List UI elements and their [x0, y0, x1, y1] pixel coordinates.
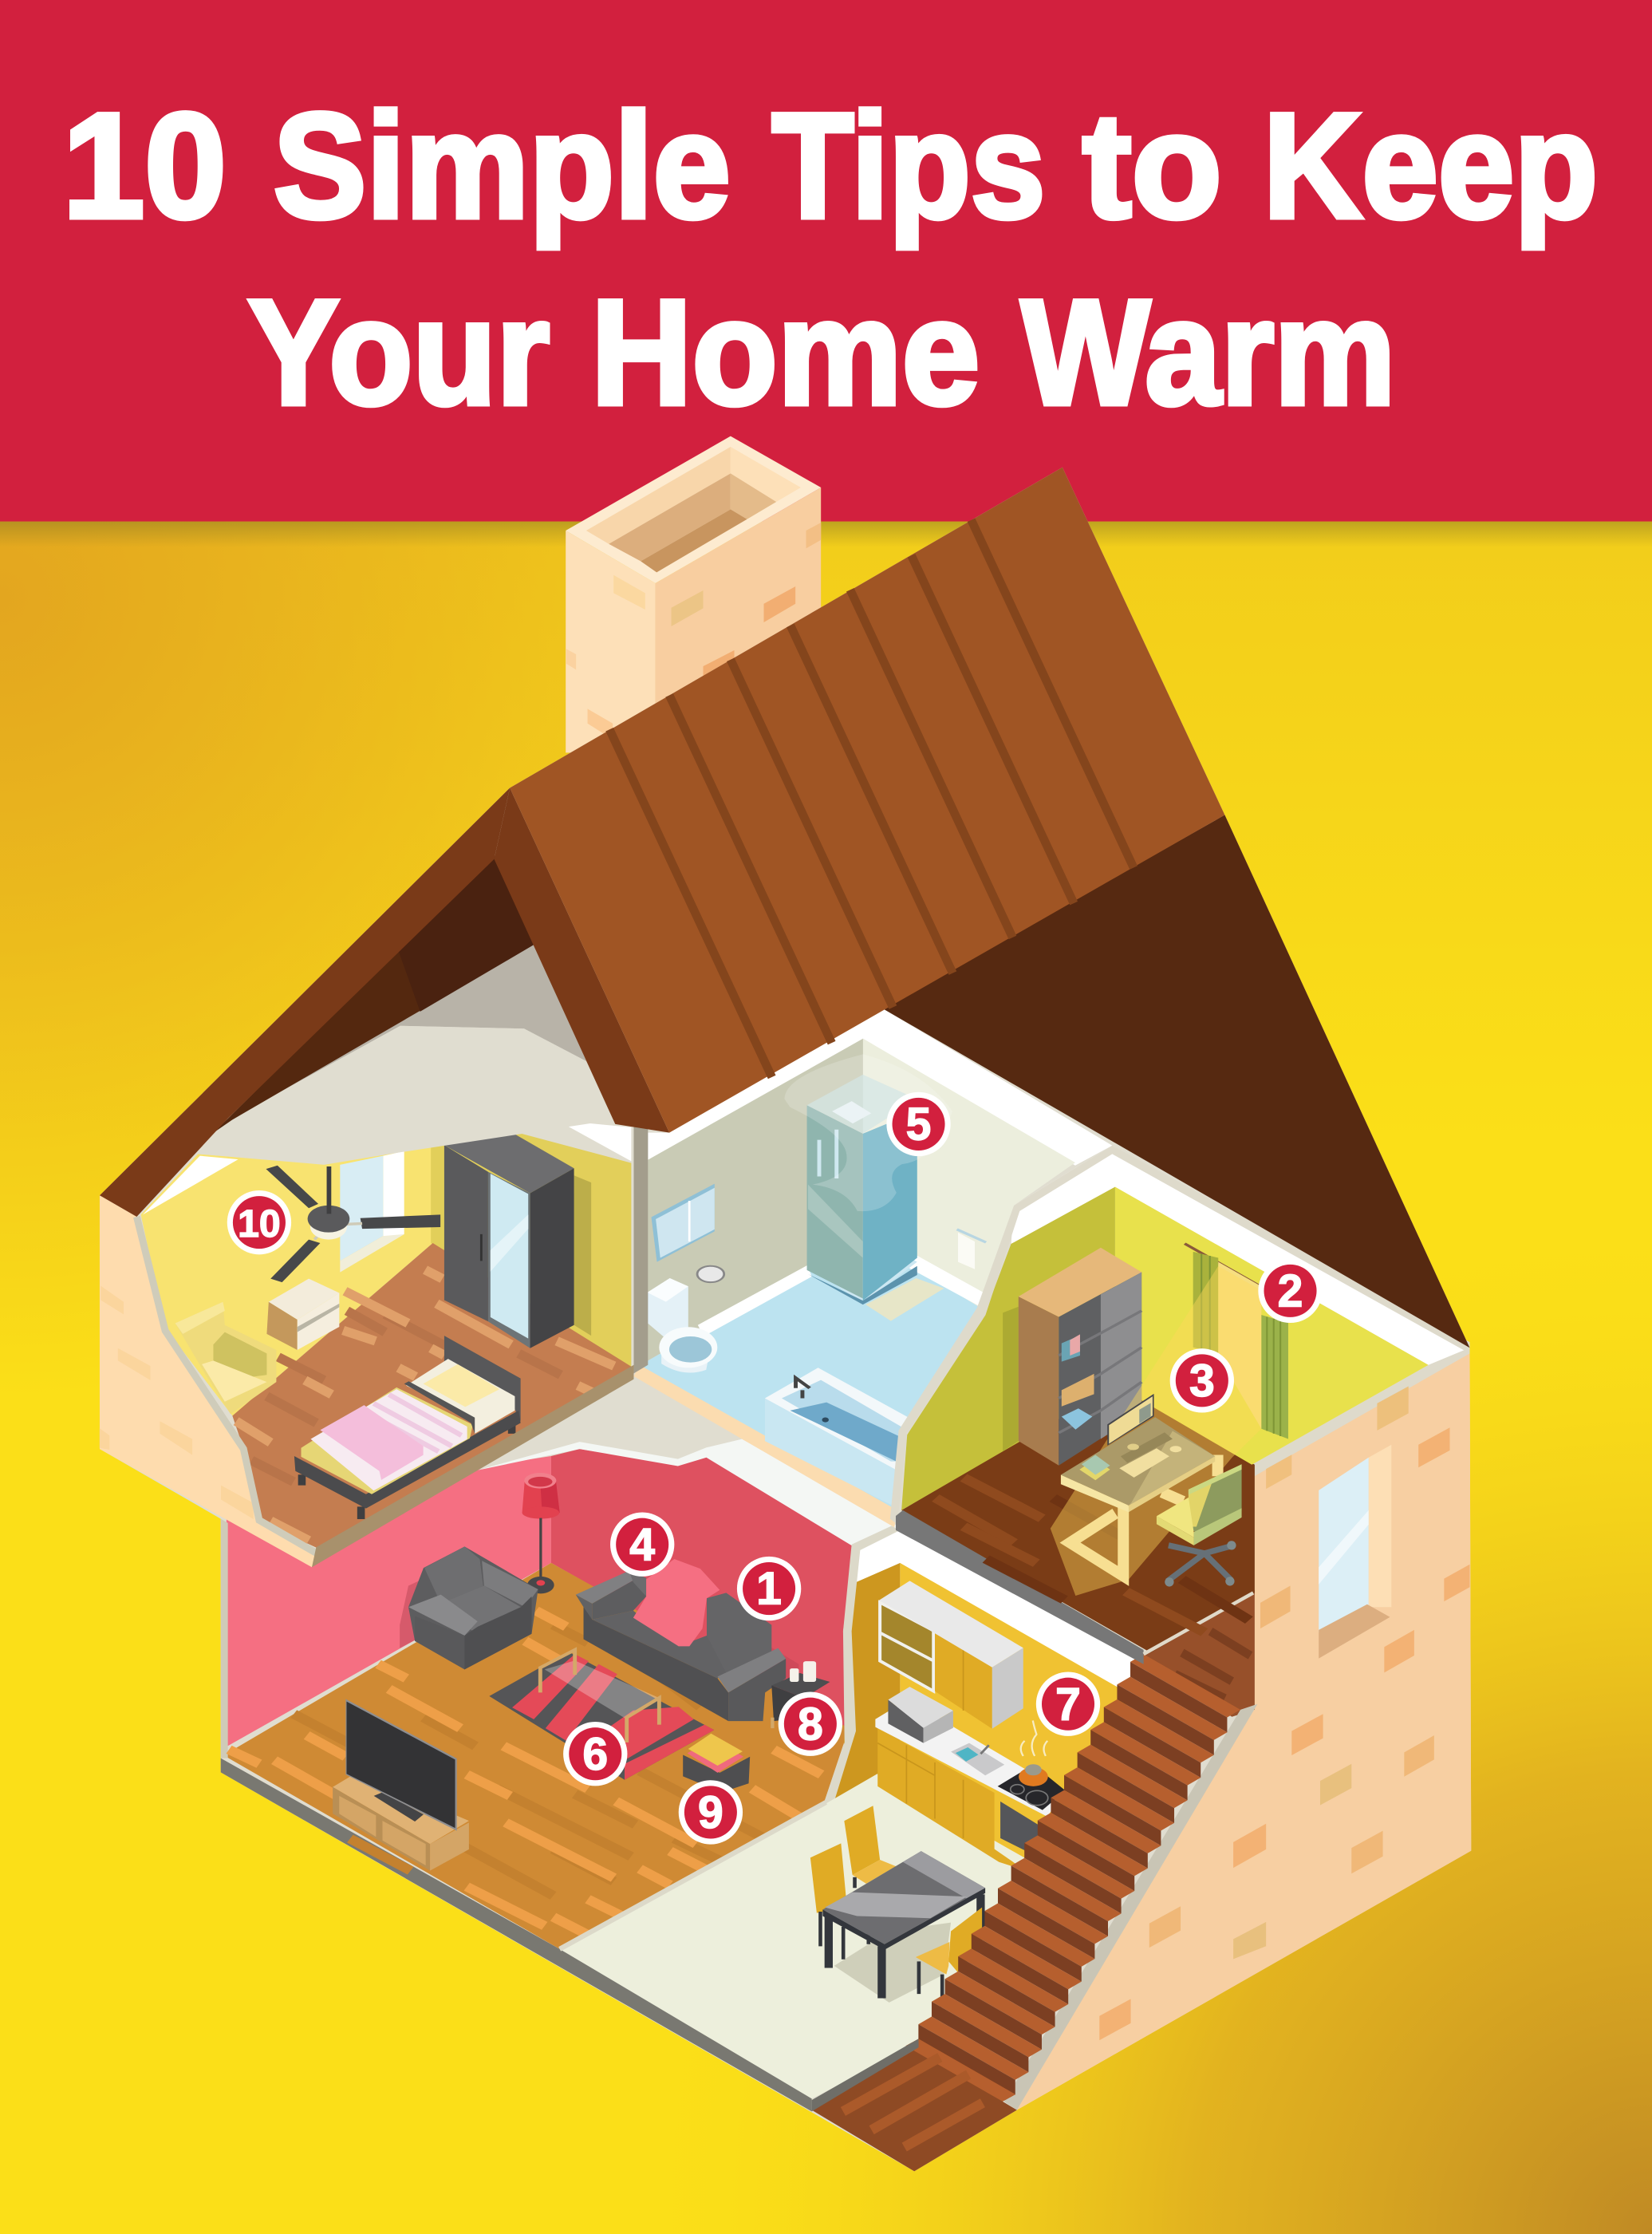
throw blanket — [633, 1559, 720, 1646]
partition between bedroom and bathroom — [633, 1126, 648, 1373]
bedroom — [100, 1120, 633, 1567]
nightstand — [266, 1279, 339, 1350]
floor lip — [221, 1758, 812, 2111]
steam — [784, 1054, 952, 1211]
chimney — [566, 436, 821, 752]
side table with candles — [771, 1661, 830, 1728]
marker 4 — [610, 1513, 674, 1577]
monitor — [1107, 1394, 1154, 1451]
sink — [951, 1743, 1004, 1775]
books — [1079, 1455, 1110, 1480]
title: Tips — [772, 81, 1045, 249]
white wall band — [854, 1526, 1151, 1695]
living room floor — [223, 1563, 849, 1949]
sofa — [576, 1571, 798, 1721]
bedroom right wall — [431, 1131, 631, 1368]
marker 5 — [886, 1092, 951, 1156]
dining floor — [560, 1710, 1125, 2098]
roof — [100, 468, 1469, 1348]
numbered markers — [227, 1092, 1323, 1845]
marker 3: 3 — [1189, 1356, 1215, 1407]
office room — [890, 1146, 1469, 1664]
mouse — [1170, 1446, 1181, 1452]
title: to — [1082, 81, 1222, 249]
roof ribs — [609, 520, 1134, 1077]
bath mat — [865, 1278, 944, 1321]
marker 2: 2 — [1278, 1265, 1303, 1317]
roof underside dark — [214, 855, 534, 1133]
desk — [1061, 1394, 1218, 1576]
marker 3 — [1170, 1348, 1234, 1413]
towel rack — [957, 1229, 986, 1269]
white ceiling band — [557, 1120, 631, 1161]
marker 2 — [1258, 1259, 1323, 1323]
marker 8: 8 — [798, 1699, 823, 1750]
mirror — [652, 1184, 715, 1262]
upper cabinets — [879, 1581, 1023, 1729]
right brick wall — [1017, 1342, 1471, 2110]
top white band — [1011, 1146, 1469, 1365]
bedroom planks — [236, 1270, 614, 1541]
office left wall — [901, 1187, 1115, 1510]
office planks — [936, 1478, 1249, 1632]
bath floor — [640, 1237, 985, 1510]
armchair — [400, 1546, 538, 1669]
marker 4: 4 — [629, 1519, 655, 1570]
floor lamp — [522, 1473, 560, 1593]
wall edge left — [221, 1519, 228, 1758]
bookshelf — [1003, 1248, 1141, 1466]
marker 5: 5 — [906, 1099, 931, 1151]
marker 1 — [737, 1557, 801, 1620]
marker 6 — [563, 1722, 627, 1786]
yellow background — [0, 522, 1652, 2234]
right roof dark side — [883, 815, 1469, 1348]
staircase — [812, 1590, 1257, 2171]
marker 6: 6 — [582, 1729, 608, 1780]
curtains — [1185, 1244, 1288, 1439]
bathtub — [765, 1368, 910, 1506]
left brick wall — [100, 1195, 316, 1567]
keyboard — [1119, 1448, 1169, 1478]
title: Simple — [274, 81, 731, 249]
lower cabinets — [875, 1699, 1066, 1871]
floor planks — [229, 1611, 822, 1935]
left eave — [100, 788, 510, 1217]
bedroom wall edge — [136, 1217, 316, 1553]
marker 8 — [779, 1692, 842, 1756]
shower — [784, 1054, 952, 1304]
gable side — [495, 788, 669, 1133]
marker 9 — [679, 1780, 743, 1845]
office floor — [901, 1385, 1255, 1652]
wall window — [1319, 1445, 1391, 1659]
header banner — [0, 0, 1652, 522]
bathroom — [633, 1008, 1112, 1527]
title: 10 — [63, 81, 227, 249]
marker 9: 9 — [698, 1787, 723, 1838]
kitchen right wall — [900, 1563, 1132, 1881]
title: Warm — [1021, 268, 1396, 436]
brick patches — [1099, 1387, 1469, 2040]
TV cabinet — [333, 1773, 469, 1871]
office right wall — [1115, 1187, 1429, 1465]
oven — [1000, 1802, 1043, 1857]
main roof face — [510, 468, 1224, 1133]
bath right wall — [863, 1039, 1075, 1315]
bedroom window — [340, 1151, 404, 1273]
bedroom left wall — [141, 1147, 433, 1416]
ottoman — [683, 1734, 750, 1792]
living room left wall — [227, 1456, 551, 1747]
living room — [221, 1376, 900, 2111]
kitchen left wall — [825, 1563, 900, 1805]
wardrobe — [444, 1131, 591, 1348]
light beam — [1051, 1266, 1261, 1596]
toilet — [648, 1278, 717, 1373]
title: Keep — [1264, 81, 1598, 249]
living room right wall — [551, 1449, 854, 1731]
floor lip — [896, 1510, 1144, 1664]
rug — [489, 1652, 714, 1780]
marker 10 — [227, 1190, 291, 1254]
attic ceiling — [198, 945, 615, 1164]
bath top band — [648, 1008, 1112, 1166]
microwave — [888, 1687, 953, 1743]
house silhouette backing — [100, 468, 1471, 2171]
marker 7: 7 — [1055, 1679, 1081, 1730]
marker 10: 10 — [238, 1202, 281, 1245]
ceiling remnant — [316, 1376, 900, 1565]
marker 7 — [1036, 1672, 1100, 1736]
office chair — [1157, 1464, 1242, 1587]
dining table — [810, 1806, 985, 2007]
yellow armchair — [175, 1302, 276, 1414]
bedroom floor lip — [312, 1365, 633, 1567]
title: Your — [248, 268, 550, 436]
coffee table — [540, 1650, 659, 1743]
bedroom floor — [232, 1243, 633, 1548]
bath left wall — [648, 1039, 863, 1360]
partition edge — [823, 1526, 900, 1810]
bed — [294, 1336, 521, 1519]
stove — [998, 1765, 1066, 1810]
kettle and steam — [1019, 1720, 1048, 1786]
dining floor divider — [560, 1802, 826, 1949]
title: Home — [591, 268, 980, 436]
kitchen and dining room — [100, 468, 1471, 2171]
television — [345, 1699, 457, 1831]
title — [63, 81, 1598, 436]
ceiling fan — [266, 1166, 440, 1282]
toilet paper — [697, 1266, 724, 1282]
marker 1: 1 — [756, 1564, 782, 1615]
